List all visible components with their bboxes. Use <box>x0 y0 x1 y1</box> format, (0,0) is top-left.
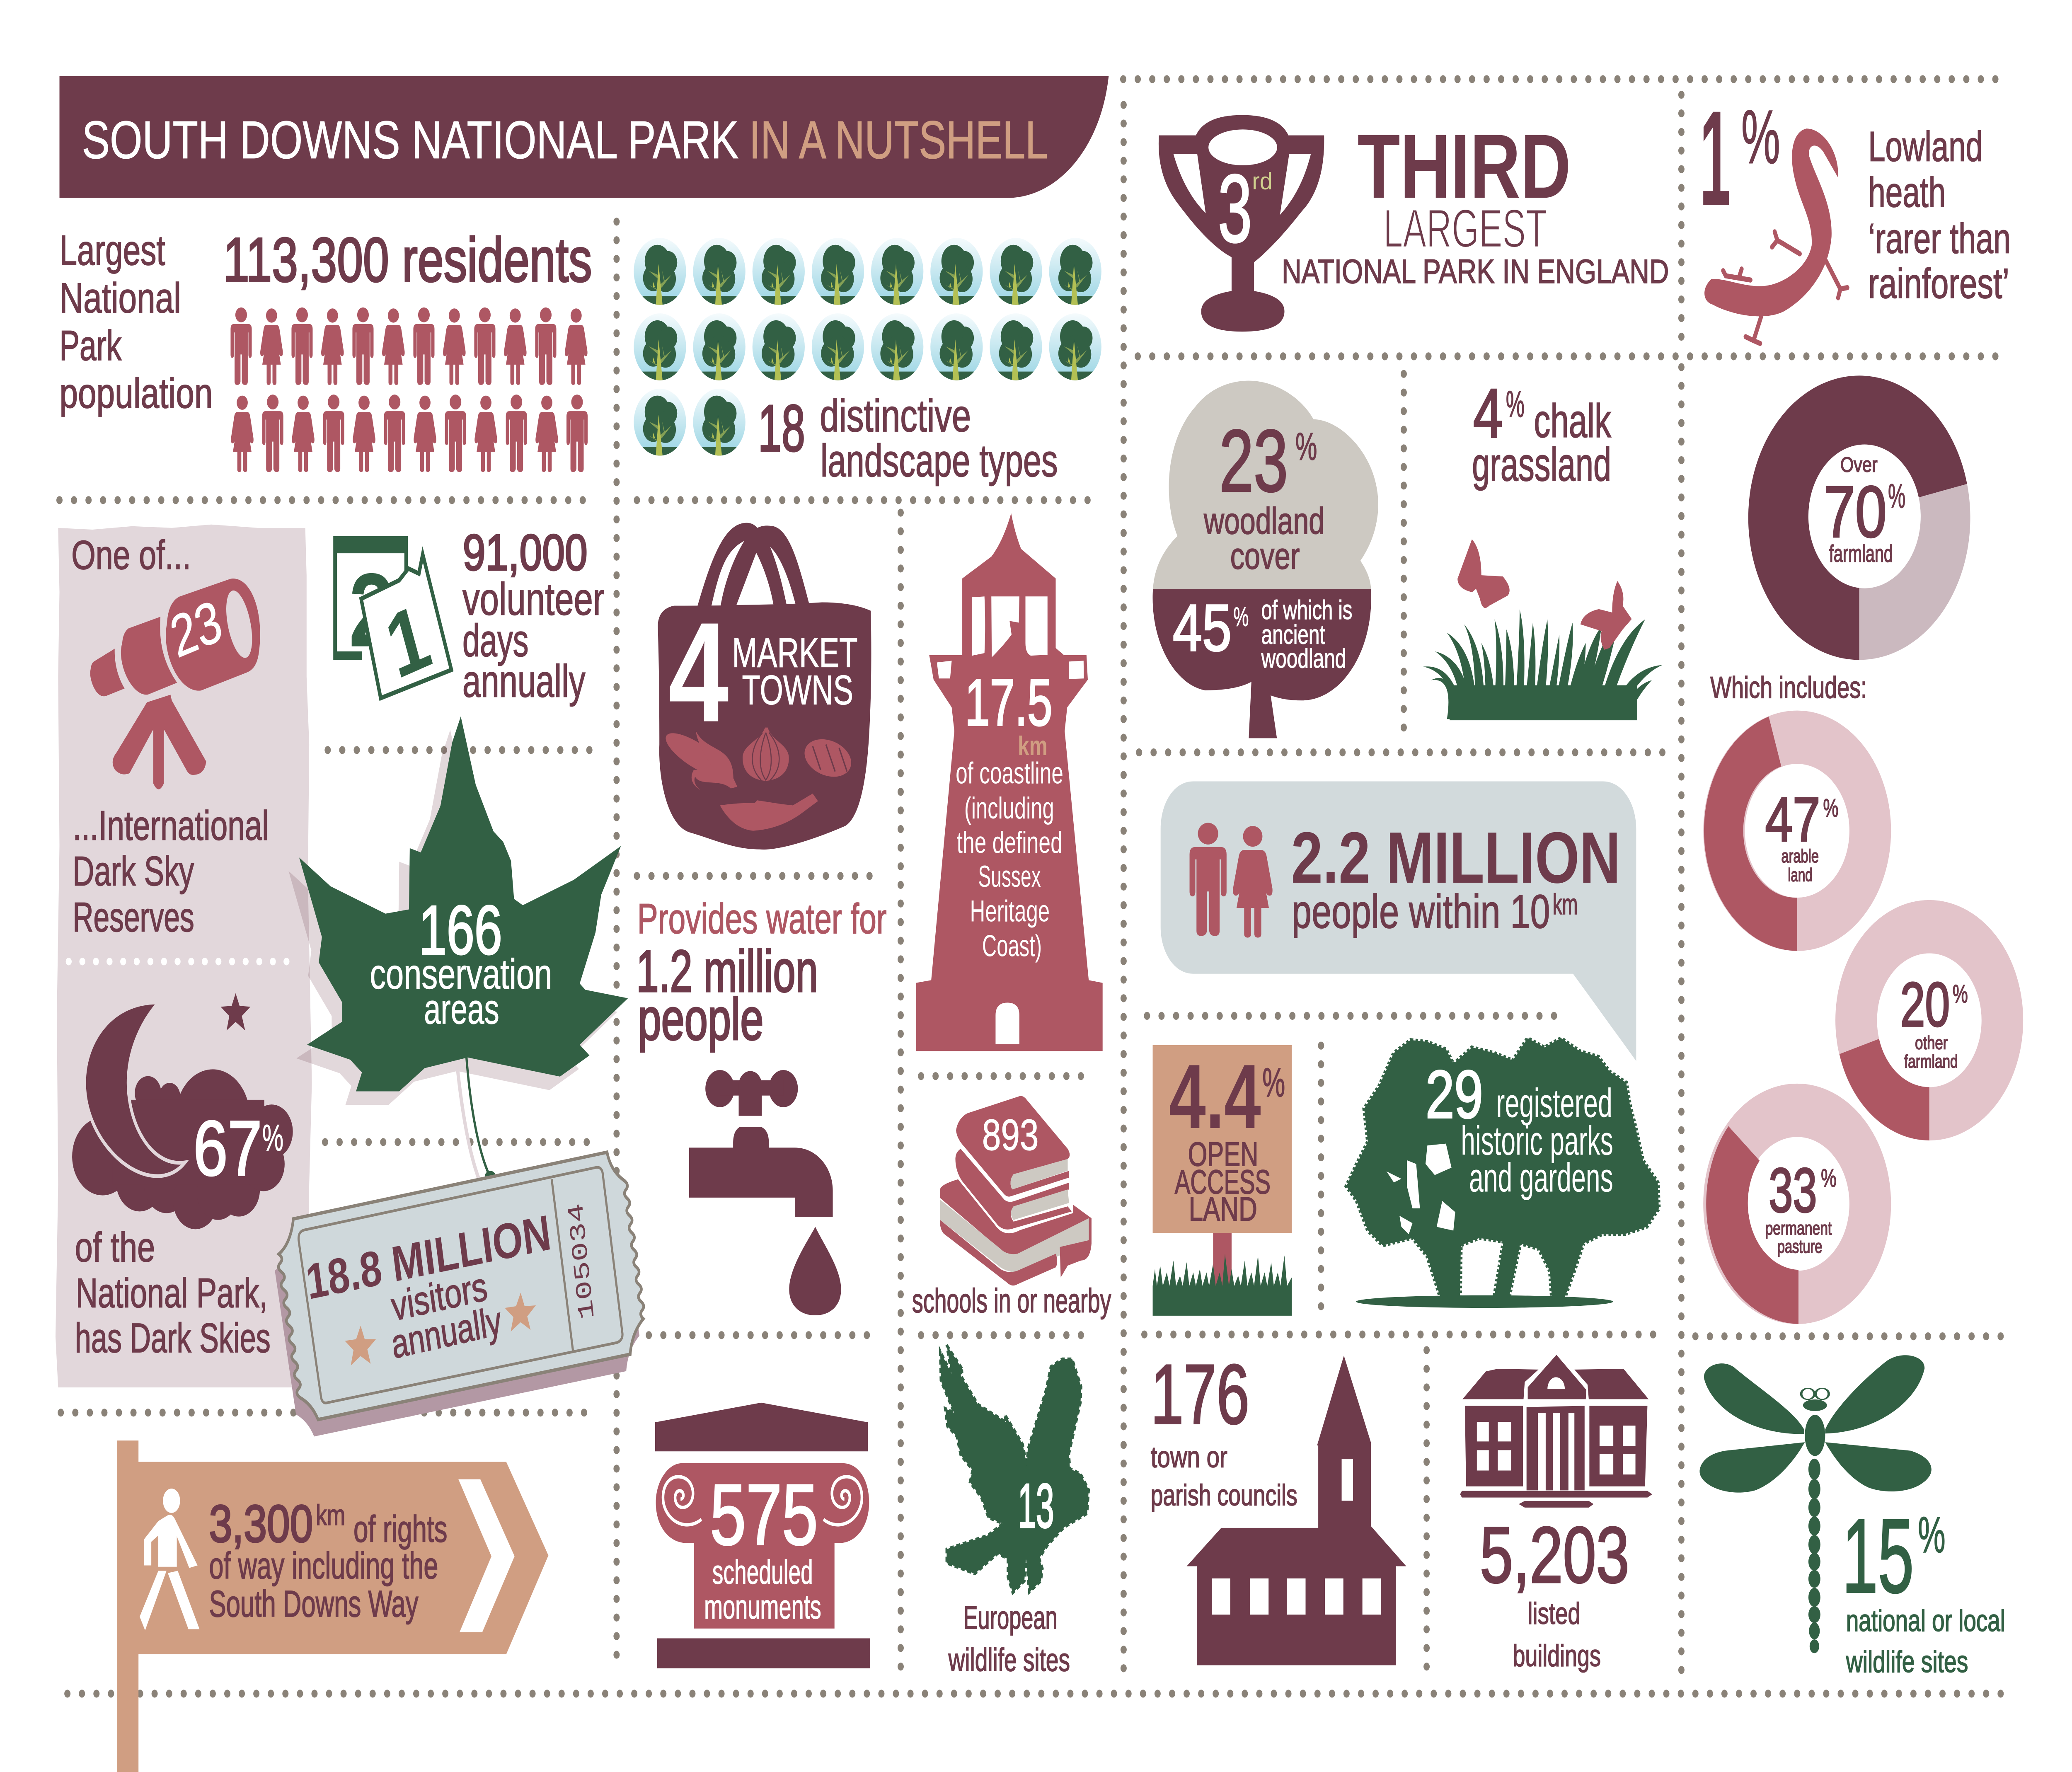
icon: walker <box>140 1489 200 1630</box>
lighthouse <box>916 513 1103 1051</box>
icon: trophy: rd <box>1252 168 1273 194</box>
buildings text <box>1480 1511 1629 1673</box>
chart: other farmland donut <box>1840 927 2002 1140</box>
icon: historic park trees: historic parks <box>1461 1118 1613 1164</box>
icon: calendar <box>333 536 451 698</box>
chart: farmland donut: 70 <box>1824 471 1887 552</box>
buildings text: 5,203 <box>1480 1511 1629 1600</box>
heath text: ‘rarer than <box>1868 215 2011 262</box>
ticket: visitors <box>275 1152 644 1436</box>
icon: woodland tree: woodland <box>1203 501 1324 542</box>
landscape types text <box>758 390 1058 486</box>
icon: onion <box>743 728 789 781</box>
chart: arable donut: 47 <box>1765 784 1820 855</box>
dark skies text: has Dark Skies <box>75 1315 271 1361</box>
icon: market bag: TOWNS <box>742 667 853 714</box>
icon: corn <box>662 725 737 790</box>
councils text: 176 <box>1151 1347 1249 1441</box>
residents heading: 113,300 residents <box>223 225 592 295</box>
third largest text: THIRD <box>1358 115 1571 217</box>
icon: cloud and moon: 67 <box>194 1104 262 1192</box>
chart: permanent pasture donut: pasture <box>1777 1236 1822 1257</box>
chart: farmland donut: farmland <box>1829 540 1893 567</box>
lighthouse: km <box>1018 731 1048 761</box>
dark sky reserves text <box>73 803 269 941</box>
icon: trophy <box>1159 115 1324 332</box>
population text <box>59 227 213 417</box>
icon: column with monuments text: 575 <box>710 1466 818 1563</box>
signpost: rights of way: km <box>316 1500 345 1532</box>
heath percent: % <box>1741 94 1780 179</box>
signpost: rights of way: South Downs Way <box>209 1583 419 1625</box>
wildlife percent text <box>1842 1498 2005 1679</box>
icon: column with monuments text: monuments <box>704 1588 821 1626</box>
lighthouse: Heritage <box>970 894 1050 928</box>
icon: conservation leaf: 166 <box>419 891 502 969</box>
chart: arable donut: % <box>1823 794 1839 822</box>
open access land sign: ACCESS <box>1175 1163 1271 1201</box>
ticket: visitors: 18.8 MILLION <box>303 1204 554 1310</box>
third largest text: NATIONAL PARK IN ENGLAND <box>1282 253 1669 290</box>
icon: woodland tree: 45 <box>1173 591 1232 665</box>
wildlife sites caption <box>948 1600 1070 1678</box>
population text: Largest <box>59 227 165 274</box>
dark skies text: National Park, <box>76 1270 268 1317</box>
dark sky reserves text: ...International <box>73 803 269 849</box>
chalk grassland text: 4 <box>1473 374 1503 452</box>
speech bubble: population within 10km: km <box>1553 889 1578 921</box>
third largest text: LARGEST <box>1383 198 1547 259</box>
chart: arable donut <box>1704 717 1870 951</box>
chart: arable donut: arable <box>1781 846 1819 867</box>
chevron arrow <box>458 1479 515 1632</box>
title banner: IN A NUTSHELL <box>749 111 1048 170</box>
chart: permanent pasture donut: % <box>1821 1164 1837 1192</box>
water text: people <box>638 986 763 1053</box>
chart: other farmland donut: farmland <box>1904 1051 1958 1072</box>
chart: farmland donut: % <box>1888 477 1905 515</box>
ticket: visitors: visitors <box>389 1263 490 1329</box>
icon: sign grass <box>1153 1254 1292 1316</box>
volunteer days text: annually <box>462 655 586 707</box>
icon: market bag: MARKET <box>732 630 858 676</box>
one of text: One of... <box>71 532 191 578</box>
icon: owl <box>940 1345 1089 1593</box>
councils text: town or <box>1151 1440 1227 1474</box>
icon: conservation leaf <box>299 717 628 1181</box>
icon: books <box>940 1096 1092 1285</box>
volunteer days text: volunteer <box>462 573 605 625</box>
third largest text <box>1282 115 1669 290</box>
icon: woodland tree: woodland <box>1261 644 1346 674</box>
icon: woodland tree: 23 <box>1219 412 1288 510</box>
schools caption: schools in or nearby <box>912 1282 1111 1319</box>
landscape types text: landscape types <box>821 435 1058 486</box>
open access land sign <box>1153 1045 1292 1316</box>
icon: listed building <box>1460 1355 1652 1508</box>
speech bubble: population within 10km <box>1161 781 1636 1061</box>
wildlife percent text: % <box>1918 1507 1946 1564</box>
wildlife percent text: national or local <box>1846 1603 2005 1637</box>
icon: church <box>1187 1356 1406 1665</box>
chart: permanent pasture donut: 33 <box>1769 1155 1817 1225</box>
icon: fish <box>720 794 818 831</box>
volunteer days text: 91,000 <box>463 525 588 581</box>
icon: telescope: 23 <box>164 588 228 671</box>
icon: grass <box>1423 609 1662 720</box>
chart: permanent pasture donut <box>1706 1110 1870 1324</box>
icon: trophy: 3 <box>1218 155 1252 263</box>
icon: woodland tree <box>1153 381 1378 738</box>
dark sky reserves text: Dark Sky <box>73 848 194 895</box>
wildlife percent text: wildlife sites <box>1846 1644 1968 1679</box>
water text: Provides water for <box>637 896 887 942</box>
signpost: rights of way: of rights <box>353 1508 447 1550</box>
chalk grassland text: grassland <box>1472 438 1611 491</box>
icon: dragonfly <box>1699 1355 1932 1653</box>
wildlife sites caption: wildlife sites <box>948 1642 1070 1678</box>
which includes label: Which includes: <box>1710 670 1867 704</box>
icon: conservation leaf: conservation <box>370 951 552 998</box>
population text: National <box>59 275 181 322</box>
icon: salamander <box>1704 128 1847 344</box>
icon: telescope <box>90 579 260 789</box>
icon: cloud and moon: % <box>262 1117 283 1159</box>
icon: conservation leaf: areas <box>424 986 499 1033</box>
icon: calendar: 1 <box>376 585 440 698</box>
wildlife percent text: 15 <box>1842 1498 1914 1615</box>
panel: dark skies <box>56 525 312 1387</box>
chart: farmland donut: Over <box>1840 453 1878 476</box>
icon: leaf shadow <box>288 730 617 1105</box>
open access land sign: 4.4 <box>1169 1046 1261 1147</box>
buildings text: buildings <box>1513 1639 1601 1673</box>
lighthouse: the defined <box>957 825 1063 859</box>
chart: other farmland donut: % <box>1953 979 1968 1008</box>
open access land sign: % <box>1262 1060 1285 1105</box>
icon: woodland tree: % <box>1233 602 1249 632</box>
icon: historic park trees: and gardens <box>1469 1155 1613 1201</box>
icon: woodland tree: % <box>1295 425 1317 468</box>
landscape tree icons <box>634 238 1101 457</box>
lighthouse: of coastline <box>956 755 1063 790</box>
chart: permanent pasture donut: permanent <box>1765 1218 1832 1239</box>
buildings text: listed <box>1527 1596 1581 1630</box>
speech bubble: population within 10km: 2.2 MILLION <box>1291 817 1621 898</box>
icon: tap and drop <box>689 1070 841 1315</box>
chart: other farmland donut: other <box>1915 1032 1948 1053</box>
ticket: visitors: annually <box>389 1298 504 1367</box>
chart: farmland donut <box>1748 375 1970 660</box>
icon: historic park trees <box>1346 1038 1659 1308</box>
water text <box>636 896 887 1053</box>
chalk grassland text <box>1472 374 1612 491</box>
heath text: heath <box>1868 169 1946 216</box>
icon: woodland tree: cover <box>1230 535 1300 577</box>
open access land sign: LAND <box>1189 1190 1257 1228</box>
heath text: rainforest’ <box>1868 260 2009 307</box>
icon: historic park trees: 29 <box>1426 1057 1483 1133</box>
icon: column with monuments text: scheduled <box>712 1553 813 1591</box>
icon: books: 893 <box>982 1111 1038 1160</box>
chart: arable donut: land <box>1788 864 1813 885</box>
population text: Park <box>59 322 122 370</box>
councils text: parish councils <box>1151 1479 1297 1512</box>
signpost: rights of way: 3,300 <box>209 1495 313 1553</box>
icon: historic park trees: registered <box>1496 1080 1612 1126</box>
title banner: SOUTH DOWNS NATIONAL PARK <box>82 111 739 170</box>
lighthouse: 17.5 <box>965 666 1053 739</box>
icon: market bag: 4 <box>668 593 729 752</box>
icon: column with monuments text <box>655 1403 870 1668</box>
chalk grassland text: % <box>1506 384 1525 425</box>
landscape types text: 18 <box>758 392 805 465</box>
dark skies text <box>75 1225 271 1361</box>
residents people icons <box>230 307 588 472</box>
water text: 1.2 million <box>636 938 818 1005</box>
landscape types text: distinctive <box>820 390 971 441</box>
councils text <box>1151 1347 1297 1512</box>
lighthouse: (including <box>964 791 1054 825</box>
icon: cloud and moon <box>72 1002 293 1229</box>
speech bubble: population within 10km: people within 10 <box>1292 885 1550 938</box>
dark sky reserves text: Reserves <box>73 894 194 941</box>
icon: woodland tree: of which is <box>1261 595 1352 625</box>
signpost: rights of way <box>117 1440 548 1772</box>
icon: woodland tree: ancient <box>1261 620 1325 650</box>
icon: butterflies <box>1457 539 1632 650</box>
open access land sign: OPEN <box>1188 1135 1258 1173</box>
lighthouse: Coast) <box>982 929 1042 963</box>
wildlife sites caption: European <box>963 1600 1058 1635</box>
icon: calendar: 2 <box>349 552 395 669</box>
volunteer days text: days <box>462 615 529 666</box>
chalk grassland text: chalk <box>1534 394 1612 448</box>
icon: bread <box>801 733 854 783</box>
signpost: rights of way: of way including the <box>209 1545 438 1587</box>
lighthouse: Sussex <box>978 859 1041 893</box>
dark skies text: of the <box>75 1225 155 1271</box>
heath text <box>1868 123 2011 307</box>
icon: star <box>221 993 250 1030</box>
icon: market bag <box>658 523 871 850</box>
heath percent: 1 <box>1700 83 1731 234</box>
icon: owl: 13 <box>1018 1471 1054 1541</box>
chart: other farmland donut: 20 <box>1900 969 1950 1039</box>
volunteer days text <box>462 525 605 707</box>
population text: population <box>59 370 213 417</box>
heath text: Lowland <box>1868 123 1983 170</box>
ticket: visitors: 105034 <box>563 1201 600 1321</box>
title banner <box>59 76 1109 198</box>
